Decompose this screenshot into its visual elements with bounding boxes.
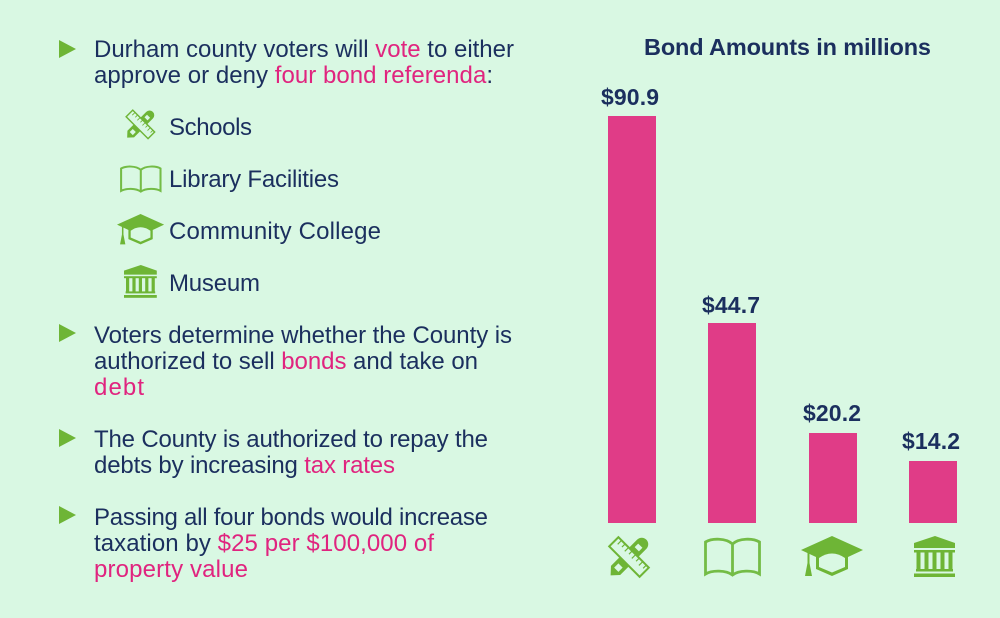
bar: Museum: $14.2: [902, 428, 960, 454]
icon: open book: [121, 167, 161, 192]
bar: Schools: $90.9: [601, 84, 659, 110]
bullet list item: referenda intro: [59, 36, 514, 89]
bullet list item: repayment: [59, 426, 488, 479]
bar: Library: $44.7: [702, 292, 760, 318]
list: four bond referenda: [117, 109, 381, 298]
text: intro: [94, 36, 514, 89]
arrow bullet: [59, 324, 76, 342]
icon: graduation cap: [117, 214, 164, 244]
arrow bullet: [59, 506, 76, 524]
bullet list item: bonds and debt: [59, 322, 512, 401]
bar: Museum: [902, 428, 960, 523]
text: repayment: [94, 426, 488, 479]
text: intro: approve or deny four bond referenda:: [94, 62, 493, 89]
bar chart: [601, 84, 960, 523]
text: intro: Durham county voters will vote to either: [94, 36, 514, 63]
text: taxation: taxation by $25 per $100,000 of: [94, 530, 434, 557]
bar: Community College: $20.2: [803, 400, 861, 426]
icon: museum: [124, 265, 157, 298]
icon: ruler and pencil axis label: [606, 535, 651, 580]
chart title: Bond Amounts in millions: [644, 34, 931, 60]
text: bonds and debt: [94, 322, 512, 401]
label: Museum: Museum: [169, 270, 260, 297]
label: Library Facilities: Library Facilities: [169, 166, 339, 193]
label: Community College: Community College: [169, 218, 381, 245]
bullet list item: taxation: [59, 504, 488, 583]
icon: open book axis label: [706, 539, 760, 575]
bar: Schools: [601, 84, 659, 523]
icon: museum axis label: [914, 536, 955, 577]
arrow bullet: [59, 429, 76, 447]
text: taxation: property value: [94, 556, 248, 583]
text: bonds and debt: Voters determine whether the County is: [94, 322, 512, 349]
text: taxation: Passing all four bonds would increase: [94, 504, 488, 531]
label: Schools: Schools: [169, 114, 252, 141]
text: repayment: The County is authorized to repay the: [94, 426, 488, 453]
bar: Library: [702, 292, 760, 523]
text: bonds and debt: authorized to sell bonds and take on: [94, 348, 478, 375]
text: repayment: debts by increasing tax rates: [94, 452, 395, 479]
text: taxation: [94, 504, 488, 583]
arrow bullet: [59, 40, 76, 58]
bar: Community College: [803, 400, 861, 523]
text: bonds and debt: debt: [94, 374, 144, 401]
icon: ruler and pencil: [124, 109, 156, 141]
icon: graduation cap axis label: [801, 536, 863, 576]
